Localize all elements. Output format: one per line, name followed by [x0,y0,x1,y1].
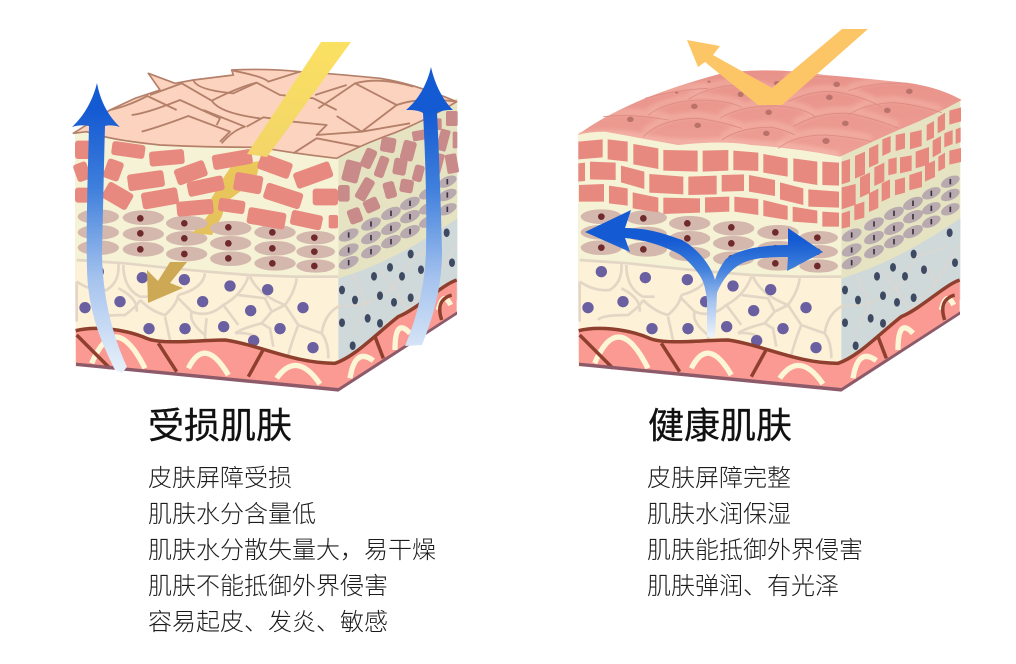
arrow: UV ray entering the surface [247,42,351,157]
text block: healthy skin points: 肌肤能抵御外界侵害 [647,537,863,564]
text block: damaged skin points: 肌肤水分散失量大，易干燥 [148,537,436,564]
text block: damaged skin points: 肌肤水分含量低 [148,501,316,528]
healthy skin surface [578,70,962,157]
arrow: water loss right [405,67,453,346]
lower skin layers [578,98,962,392]
panel: healthy skin cube [578,29,962,392]
text block: damaged skin points: 皮肤屏障受损 [148,465,292,492]
text block: damaged skin points: 容易起皮、发炎、敏感 [148,609,388,636]
arrow: water loss left [72,83,127,373]
text block: healthy skin points: 皮肤屏障完整 [647,465,791,492]
damaged brick cells [72,111,459,231]
arrow: water retained, branching [585,210,823,337]
heading: damaged skin: 受损肌肤 [148,405,292,446]
text block: damaged skin points: 肌肤不能抵御外界侵害 [148,573,388,600]
arrow: ray reflected [687,29,868,105]
text block: healthy skin points: 肌肤弹润、有光泽 [647,573,839,600]
cracked skin surface [73,69,457,158]
text block: healthy skin points [647,465,863,600]
heading: healthy skin: 健康肌肤 [648,405,792,446]
arrow: UV ray head in the basal layer [147,262,187,303]
ray passing through the epidermis [166,161,260,236]
lower skin layers [75,98,459,392]
panel: damaged skin cube [72,42,459,392]
text block: healthy skin points: 肌肤水润保湿 [647,501,791,528]
text block: damaged skin points [148,465,436,636]
regular brick cells [578,107,961,229]
